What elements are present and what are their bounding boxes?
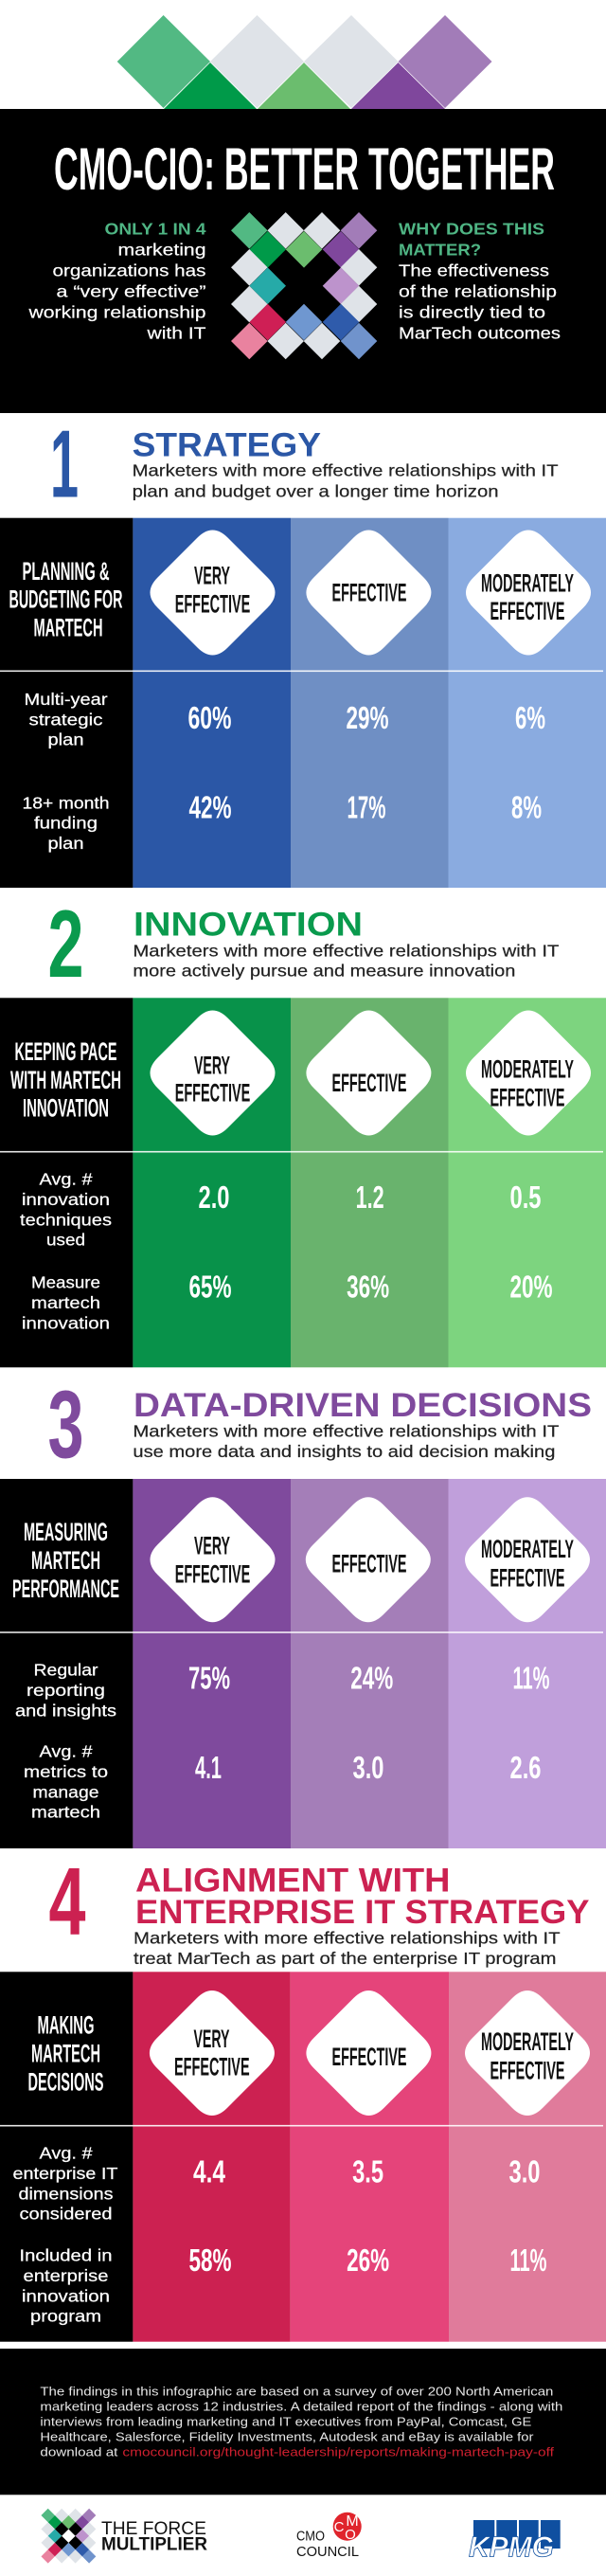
diamond: moderately effective <box>465 1497 590 1622</box>
text block: data subtitle: use more data and insights to aid decision making <box>133 1442 555 1461</box>
values: row 2: 20% <box>509 1270 553 1305</box>
row label: avg metrics to manage martech: martech <box>31 1803 100 1822</box>
values: row 1: 4.4 <box>193 2154 225 2189</box>
values: row 1: 1.2 <box>356 1180 384 1216</box>
row label: included in enterprise innovation program: program <box>30 2307 101 2326</box>
wordmark: the force multiplier: THE FORCE <box>101 2519 206 2539</box>
row label: regular reporting and insights: and insights <box>15 1701 116 1720</box>
icon: red circle: M <box>346 2513 359 2530</box>
values: row 2: 3.0 <box>352 1751 384 1786</box>
text block: data subtitle <box>133 1422 560 1461</box>
values: row 2 <box>189 790 542 825</box>
text block: only 1 in 4: with IT <box>146 323 206 342</box>
values: row 1 <box>188 1661 549 1696</box>
text block: why does this matter: of the relationship <box>399 281 557 300</box>
diamond: very effective <box>150 1497 275 1622</box>
values: row 2: 17% <box>347 790 386 825</box>
icon: red circle: O <box>345 2527 356 2543</box>
row heading: MAKING <box>38 2011 95 2040</box>
diamond: very effective: VERY <box>194 562 230 590</box>
row label: 18+ month funding plan <box>23 793 109 853</box>
text block: data subtitle: Marketers with more effective relationships with IT <box>133 1422 560 1441</box>
values: row 1: 24% <box>350 1661 393 1696</box>
table: making decisions <box>0 1972 606 2342</box>
values: row 1: 29% <box>347 701 388 736</box>
icon: small diamond X <box>41 2509 96 2564</box>
row label: included in enterprise innovation program: enterprise <box>23 2266 108 2285</box>
row heading: DECISIONS <box>28 2068 103 2097</box>
row heading: BUDGETING FOR <box>9 585 123 614</box>
text block: only 1 in 4: working relationship <box>27 302 205 321</box>
row heading: INNOVATION <box>23 1094 109 1123</box>
row heading: WITH MARTECH <box>10 1066 121 1094</box>
text block: alignment subtitle: Marketers with more effective relationships with IT <box>134 1929 561 1948</box>
diamond: effective <box>306 531 431 656</box>
wordmark: KPMG: KPMG <box>469 2530 554 2563</box>
values: row 2 <box>189 2243 547 2279</box>
row label: 18+ month funding plan: funding <box>34 814 98 833</box>
row label: avg metrics to manage martech: manage <box>32 1782 98 1801</box>
text block: survey findings: Healthcare, Salesforce, Fidelity Investments, Autodesk and eBay is available for <box>40 2430 534 2444</box>
diamond: effective <box>306 1010 431 1135</box>
heading: innovation: INNOVATION <box>134 907 363 944</box>
panel: header <box>0 109 606 413</box>
text block: survey findings: download at <box>40 2445 118 2459</box>
row label: avg innovation techniques: innovation <box>22 1190 110 1209</box>
row label: avg enterprise IT dimensions: enterprise IT <box>13 2164 118 2183</box>
row label: multi-year strategic plan: strategic <box>28 710 103 729</box>
diamond: very effective: VERY <box>194 1532 230 1560</box>
top diamond banner <box>117 15 491 109</box>
diamond: effective: EFFECTIVE <box>331 2043 407 2071</box>
values: row 1 <box>187 701 545 736</box>
text block: only 1 in 4: marketing <box>117 240 206 259</box>
section number 2: 2 <box>47 892 83 998</box>
section number 1: 1 <box>50 411 79 517</box>
heading: alignment with enterprise IT strategy: ALIGNMENT WITH <box>135 1863 451 1900</box>
row heading: PLANNING & <box>23 557 110 585</box>
heading: alignment with enterprise IT strategy <box>135 1863 589 1931</box>
diamond: very effective: EFFECTIVE <box>174 2053 250 2081</box>
values: row 1: 3.5 <box>352 2154 383 2189</box>
diamond: effective <box>306 1991 431 2116</box>
values: row 2: 2.6 <box>509 1751 542 1786</box>
wordmark: cmo council: CMO <box>296 2529 325 2545</box>
table: keeping pace <box>0 998 606 1367</box>
values: row 2: 36% <box>347 1270 389 1305</box>
panel: section 3 data-driven decisions <box>0 1372 606 1848</box>
row label: 18+ month funding plan: 18+ month <box>23 793 109 812</box>
row label: avg innovation techniques <box>20 1170 112 1250</box>
values: row 2: 11% <box>509 2243 547 2279</box>
row label: avg innovation techniques: techniques <box>20 1210 112 1229</box>
text block: why does this matter: MarTech outcomes <box>399 323 561 342</box>
row label: avg innovation techniques: used <box>46 1231 85 1250</box>
table: planning and budgeting <box>0 518 606 888</box>
text block: strategy subtitle <box>133 461 559 500</box>
text block: survey findings: cmocouncil.org/thought-leadership/reports/making-martech-pay-off <box>122 2445 554 2459</box>
logo: cmo council <box>296 2513 362 2560</box>
text block: alignment subtitle: treat MarTech as part of the enterprise IT program <box>134 1949 557 1968</box>
row heading: PERFORMANCE <box>12 1575 119 1603</box>
diamond: moderately effective <box>466 1010 591 1135</box>
diamond: very effective: VERY <box>193 2025 230 2053</box>
values: row 1: 6% <box>515 701 545 736</box>
wordmark: cmo council: COUNCIL <box>296 2544 359 2560</box>
text block: alignment subtitle <box>134 1929 561 1968</box>
row label: avg metrics to manage martech <box>24 1742 108 1822</box>
text block: strategy subtitle: plan and budget over a longer time horizon <box>133 481 499 500</box>
row label: regular reporting and insights: reporting <box>27 1681 105 1700</box>
row label: measure martech innovation <box>22 1273 110 1332</box>
row label: included in enterprise innovation program: Included in <box>19 2246 112 2265</box>
panel: section 2 innovation <box>0 892 606 1367</box>
row heading <box>12 1518 119 1603</box>
row label: 18+ month funding plan: plan <box>47 834 83 853</box>
row label: multi-year strategic plan: plan <box>47 730 83 749</box>
text block: why does this matter: MATTER? <box>399 240 481 259</box>
diamond: very effective: EFFECTIVE <box>175 1559 250 1588</box>
row label: included in enterprise innovation program <box>19 2246 112 2326</box>
values: row 1: 11% <box>513 1661 549 1696</box>
text block: why does this matter: is directly tied to <box>399 302 545 321</box>
text block: innovation subtitle: more actively pursue and measure innovation <box>133 962 515 981</box>
values: row 2: 26% <box>347 2243 389 2279</box>
row label: avg enterprise IT dimensions: dimensions <box>19 2184 114 2203</box>
row heading <box>28 2011 103 2097</box>
wordmark: cmo council <box>296 2529 359 2560</box>
diamond: effective: EFFECTIVE <box>331 578 407 606</box>
diamond: moderately effective <box>465 1991 590 2116</box>
row label: avg enterprise IT dimensions <box>13 2144 118 2224</box>
values: row 1: 60% <box>187 701 231 736</box>
diamond: very effective: EFFECTIVE <box>175 590 250 619</box>
icon: red circle <box>333 2513 362 2543</box>
values: row 2: 8% <box>511 790 542 825</box>
logo: kpmg <box>469 2520 561 2563</box>
row label: avg metrics to manage martech: Avg. # <box>40 1742 93 1761</box>
row heading: MEASURING <box>24 1518 108 1546</box>
row heading: KEEPING PACE <box>15 1037 117 1066</box>
row label: avg enterprise IT dimensions: Avg. # <box>40 2144 93 2163</box>
row label: avg enterprise IT dimensions: considered <box>19 2205 112 2224</box>
diamond: very effective <box>150 1010 275 1135</box>
heading: alignment with enterprise IT strategy: ENTERPRISE IT STRATEGY <box>135 1894 589 1931</box>
text block: innovation subtitle <box>133 941 560 981</box>
values: row 2: 4.1 <box>195 1751 222 1786</box>
row heading <box>10 1037 121 1123</box>
row label: avg metrics to manage martech: metrics to <box>24 1762 108 1781</box>
text block: innovation subtitle: Marketers with more effective relationships with IT <box>133 941 560 960</box>
text block: survey findings: marketing leaders across 12 industries. A detailed report of the findings - along with <box>40 2400 562 2414</box>
table: measuring performance <box>0 1479 606 1848</box>
row label: multi-year strategic plan <box>25 690 108 749</box>
values: row 1: 75% <box>188 1661 230 1696</box>
panel: section 1 strategy <box>0 411 606 888</box>
text block: survey findings: The findings in this infographic are based on a survey of over 200 North American <box>40 2385 553 2399</box>
values: row 2 <box>195 1751 542 1786</box>
text block: only 1 in 4: ONLY 1 IN 4 <box>104 219 206 238</box>
panel: footer note <box>0 2349 606 2495</box>
values: row 1: 3.0 <box>509 2154 540 2189</box>
wordmark: the force multiplier: MULTIPLIER <box>101 2535 207 2555</box>
text block: why does this matter: The effectiveness <box>399 261 549 279</box>
values: row 1 <box>193 2154 540 2189</box>
values: row 1: 2.0 <box>199 1180 229 1216</box>
diamond: very effective: EFFECTIVE <box>175 1079 250 1108</box>
row label: measure martech innovation: Measure <box>31 1273 100 1292</box>
text block: why does this matter <box>399 219 561 342</box>
values: row 1 <box>199 1180 542 1216</box>
wordmark: the force multiplier <box>101 2519 207 2555</box>
values: row 2: 65% <box>189 1270 231 1305</box>
values: row 2: 42% <box>189 790 231 825</box>
row heading: MARTECH <box>34 614 102 642</box>
row label: regular reporting and insights <box>15 1661 116 1720</box>
text block: survey findings: interviews from leading marketing and IT executives from PayPal, Comcast, GE <box>40 2415 532 2429</box>
icon: diamond X logo <box>231 212 377 359</box>
panel: section 4 alignment <box>0 1849 606 2342</box>
values: row 2 <box>189 1270 553 1305</box>
logo: the force multiplier <box>41 2509 207 2564</box>
values: row 2: 58% <box>189 2243 231 2279</box>
diamond: effective <box>306 1497 431 1622</box>
diamond: effective: EFFECTIVE <box>331 1549 407 1577</box>
values: row 1: 0.5 <box>509 1180 542 1216</box>
diamond: very effective <box>150 531 275 656</box>
row heading: MARTECH <box>31 1546 100 1575</box>
text block: strategy subtitle: Marketers with more effective relationships with IT <box>133 461 559 480</box>
row label: multi-year strategic plan: Multi-year <box>25 690 108 709</box>
section number 3: 3 <box>47 1372 83 1478</box>
diamond: moderately effective <box>466 531 591 656</box>
row label: measure martech innovation: innovation <box>22 1313 110 1332</box>
row label: measure martech innovation: martech <box>31 1293 100 1312</box>
row heading <box>9 557 123 642</box>
icon: red circle: C <box>334 2519 345 2535</box>
heading: data-driven decisions: DATA-DRIVEN DECISIONS <box>134 1387 592 1424</box>
text block: only 1 in 4: organizations has <box>53 261 206 279</box>
row heading: MARTECH <box>31 2040 100 2068</box>
section number 4: 4 <box>49 1849 85 1955</box>
heading: strategy: STRATEGY <box>133 426 321 463</box>
row label: regular reporting and insights: Regular <box>34 1661 98 1680</box>
text block: only 1 in 4: a “very effective” <box>57 281 206 300</box>
text block: why does this matter: WHY DOES THIS <box>399 219 544 238</box>
diamond: very effective <box>150 1991 275 2116</box>
text block: survey findings <box>40 2385 562 2459</box>
row label: avg innovation techniques: Avg. # <box>40 1170 93 1189</box>
row label: included in enterprise innovation program: innovation <box>22 2286 110 2305</box>
text block: only 1 in 4 <box>27 219 206 342</box>
diamond: very effective: VERY <box>194 1051 230 1079</box>
diamond: effective: EFFECTIVE <box>331 1069 407 1097</box>
